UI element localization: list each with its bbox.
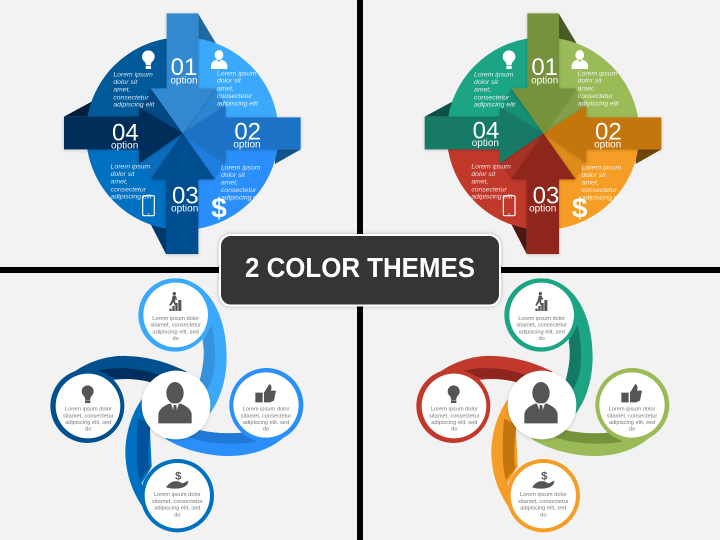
label 04: option	[111, 140, 138, 151]
icon: phone	[143, 196, 154, 216]
band shade: top	[565, 325, 581, 395]
band shade: left	[463, 368, 529, 382]
label 03: 03	[172, 182, 199, 209]
arrow 03	[151, 133, 215, 254]
fold: arrow 01	[198, 14, 216, 43]
text: bottom left: consectetur	[471, 186, 507, 193]
icon: hand with dollar: $	[175, 470, 182, 482]
band shade: left	[97, 368, 163, 382]
icon: bulb	[503, 50, 515, 69]
icon: businessman	[524, 382, 558, 423]
text: top left: consectetur	[474, 94, 510, 101]
text: bottom left: amet,	[471, 179, 489, 186]
title banner	[220, 235, 500, 306]
text: sitamet, consectetur	[150, 323, 201, 329]
icon: bulb	[82, 385, 94, 403]
text: top left: dolor sit	[113, 79, 138, 86]
text: top right: adipiscing elit	[578, 100, 620, 107]
text: bottom left: amet,	[111, 179, 128, 186]
text: top right: consectetur	[217, 93, 253, 100]
wedge: bottom left	[139, 133, 183, 179]
icon: thumb up	[621, 384, 642, 402]
wedge: top right	[543, 88, 587, 133]
node: bottom	[507, 459, 580, 532]
wedge: top left	[139, 88, 183, 133]
text: do	[629, 427, 635, 433]
text: bottom right: consectetur	[221, 187, 257, 194]
text: sitamet, consectetur	[152, 499, 203, 505]
text: adipiscing elit, sed	[243, 420, 289, 426]
text: do	[539, 336, 545, 342]
wedge: top left	[500, 88, 543, 133]
fold: arrow 02	[636, 149, 661, 164]
band: right	[165, 427, 293, 456]
icon: hand with dollar: $	[541, 470, 548, 482]
arrow 04	[425, 107, 543, 163]
text: Lorem ipsum dolor	[65, 406, 112, 412]
arrow 04	[64, 107, 183, 163]
label 04: 04	[473, 117, 499, 144]
text: top left: amet,	[113, 87, 131, 94]
wedge: top right	[183, 88, 227, 133]
label 03: option	[529, 204, 556, 215]
text: adipiscing elit, sed	[431, 420, 477, 426]
arrow 01	[511, 13, 576, 133]
text: top right: dolor sit	[578, 78, 603, 85]
band shade: right	[187, 430, 257, 444]
quadrant: bottom left	[86, 134, 182, 230]
text: bottom left: adipiscing elit	[111, 194, 153, 201]
text: bottom right: adipiscing elit	[221, 194, 263, 201]
text: top left: dolor sit	[474, 79, 499, 86]
text: do	[173, 336, 179, 342]
icon: dollar: $	[572, 192, 588, 223]
arrow 02	[543, 106, 661, 163]
text: do	[85, 427, 91, 433]
label 03: option	[171, 204, 198, 215]
label 02: option	[594, 140, 621, 151]
text: sitamet, consectetur	[607, 413, 657, 419]
text: top left: adipiscing elit	[113, 102, 155, 109]
text: top right: amet,	[217, 85, 234, 92]
text: top right: consectetur	[578, 93, 614, 100]
text: bottom left: Lorem ipsum	[111, 163, 150, 170]
center circle: person	[142, 371, 210, 439]
band: left	[426, 356, 553, 385]
arrow 02	[183, 106, 301, 163]
text: adipiscing elit, sed	[154, 506, 200, 512]
text: do	[540, 512, 546, 518]
text: top left: amet,	[474, 87, 491, 94]
icon: bulb	[448, 385, 460, 403]
text: do	[174, 512, 180, 518]
fold: arrow 03	[149, 222, 166, 254]
fold: arrow 02	[275, 149, 301, 164]
fold: arrow 04	[425, 102, 452, 117]
text: adipiscing elit, sed	[153, 329, 199, 335]
node: bottom	[141, 459, 214, 532]
band: right	[531, 427, 659, 456]
icon: climber	[169, 292, 181, 311]
text: top right: dolor sit	[217, 78, 242, 85]
icon: businessman	[158, 382, 192, 423]
text: Lorem ipsum dolor	[243, 406, 290, 412]
center circle: person	[508, 371, 576, 439]
band shade: top	[199, 325, 215, 395]
icon: phone	[503, 196, 515, 216]
wedge: bottom left	[500, 133, 543, 179]
icon: climber	[535, 292, 547, 311]
text: sitamet, consectetur	[63, 413, 114, 419]
label 01: option	[531, 75, 558, 86]
icon: person	[211, 50, 227, 69]
text: top right: amet,	[578, 85, 595, 92]
text: bottom right: consectetur	[582, 187, 618, 194]
text: top right: Lorem ipsum	[578, 70, 617, 77]
panel: multicolor arrow diagram	[425, 13, 661, 254]
label 02: option	[233, 140, 261, 151]
text: bottom right: Lorem ipsum	[221, 164, 261, 171]
text: adipiscing elit, sed	[609, 420, 655, 426]
quadrant: bottom left	[447, 134, 543, 230]
text: adipiscing elit, sed	[520, 506, 566, 512]
text: sitamet, consectetur	[241, 413, 291, 419]
fold: arrow 04	[64, 102, 92, 117]
band: left	[60, 356, 187, 385]
text: top left: adipiscing elit	[474, 102, 516, 109]
band: top	[180, 278, 227, 413]
wedge: bottom right	[183, 133, 226, 179]
node: left	[50, 369, 124, 443]
quadrant: top right	[543, 37, 639, 134]
text: Lorem ipsum dolor	[431, 406, 478, 412]
text: do	[263, 427, 269, 433]
band: top	[546, 278, 593, 413]
text: Lorem ipsum dolor	[609, 406, 656, 412]
label 02: 02	[595, 118, 622, 145]
label 04: 04	[112, 120, 139, 147]
text: do	[451, 427, 457, 433]
text: bottom right: Lorem ipsum	[582, 164, 621, 171]
node: right	[229, 368, 303, 442]
label 02: 02	[234, 118, 261, 145]
quadrant: bottom right	[182, 134, 279, 230]
label 01: 01	[531, 54, 558, 81]
label 01: option	[170, 75, 198, 86]
text: Lorem ipsum dolor	[518, 316, 565, 322]
text: Lorem ipsum dolor	[152, 316, 199, 322]
text: bottom left: dolor sit	[111, 171, 136, 178]
label 01: 01	[171, 54, 197, 81]
text: bottom right: amet,	[221, 180, 238, 187]
node: left	[416, 369, 490, 443]
text: top left: consectetur	[113, 94, 149, 101]
panel: blue swirl diagram	[50, 278, 303, 532]
quadrant: top right	[182, 37, 279, 134]
icon: dollar: $	[211, 192, 227, 223]
text: sitamet, consectetur	[518, 499, 569, 505]
text: adipiscing elit, sed	[519, 329, 565, 335]
arrow 03	[511, 133, 576, 254]
fold: arrow 01	[559, 14, 577, 43]
text: sitamet, consectetur	[516, 323, 567, 329]
band: bottom	[125, 398, 152, 518]
text: top right: adipiscing elit	[217, 100, 259, 107]
node: right	[595, 368, 669, 442]
panel: blue arrow diagram	[64, 13, 301, 254]
text: bottom right: amet,	[582, 180, 599, 187]
band shade: bottom	[137, 418, 151, 480]
band shade: right	[553, 430, 623, 444]
icon: bulb	[142, 50, 155, 69]
band: bottom	[491, 398, 518, 518]
band shade: bottom	[503, 418, 517, 480]
wedge: bottom right	[543, 133, 586, 179]
text: bottom right: dolor sit	[221, 172, 246, 179]
text: bottom right: adipiscing elit	[582, 194, 624, 201]
text: bottom right: dolor sit	[582, 172, 607, 179]
text: top left: Lorem ipsum	[474, 72, 514, 79]
text: bottom left: Lorem ipsum	[471, 163, 511, 170]
icon: person	[572, 50, 588, 69]
node: top	[138, 278, 212, 352]
quadrant: bottom right	[543, 134, 639, 230]
text: top left: Lorem ipsum	[113, 72, 153, 79]
label 03: 03	[533, 182, 559, 209]
text: bottom left: adipiscing elit	[471, 194, 513, 201]
text: bottom left: dolor sit	[471, 171, 496, 178]
text: Lorem ipsum dolor	[520, 492, 567, 498]
quadrant: top left	[447, 37, 543, 134]
icon: thumb up	[255, 384, 276, 402]
label 04: option	[472, 138, 499, 149]
title text: 2 COLOR THEMES	[245, 252, 475, 283]
panel: multicolor swirl diagram	[416, 278, 669, 532]
text: sitamet, consectetur	[429, 413, 480, 419]
node: top	[504, 278, 578, 352]
text: bottom left: consectetur	[111, 186, 147, 193]
quadrant: top left	[86, 37, 182, 134]
text: Lorem ipsum dolor	[154, 492, 201, 498]
arrow 01	[151, 13, 215, 133]
fold: arrow 03	[510, 222, 527, 254]
text: adipiscing elit, sed	[65, 420, 111, 426]
text: top right: Lorem ipsum	[217, 70, 257, 77]
